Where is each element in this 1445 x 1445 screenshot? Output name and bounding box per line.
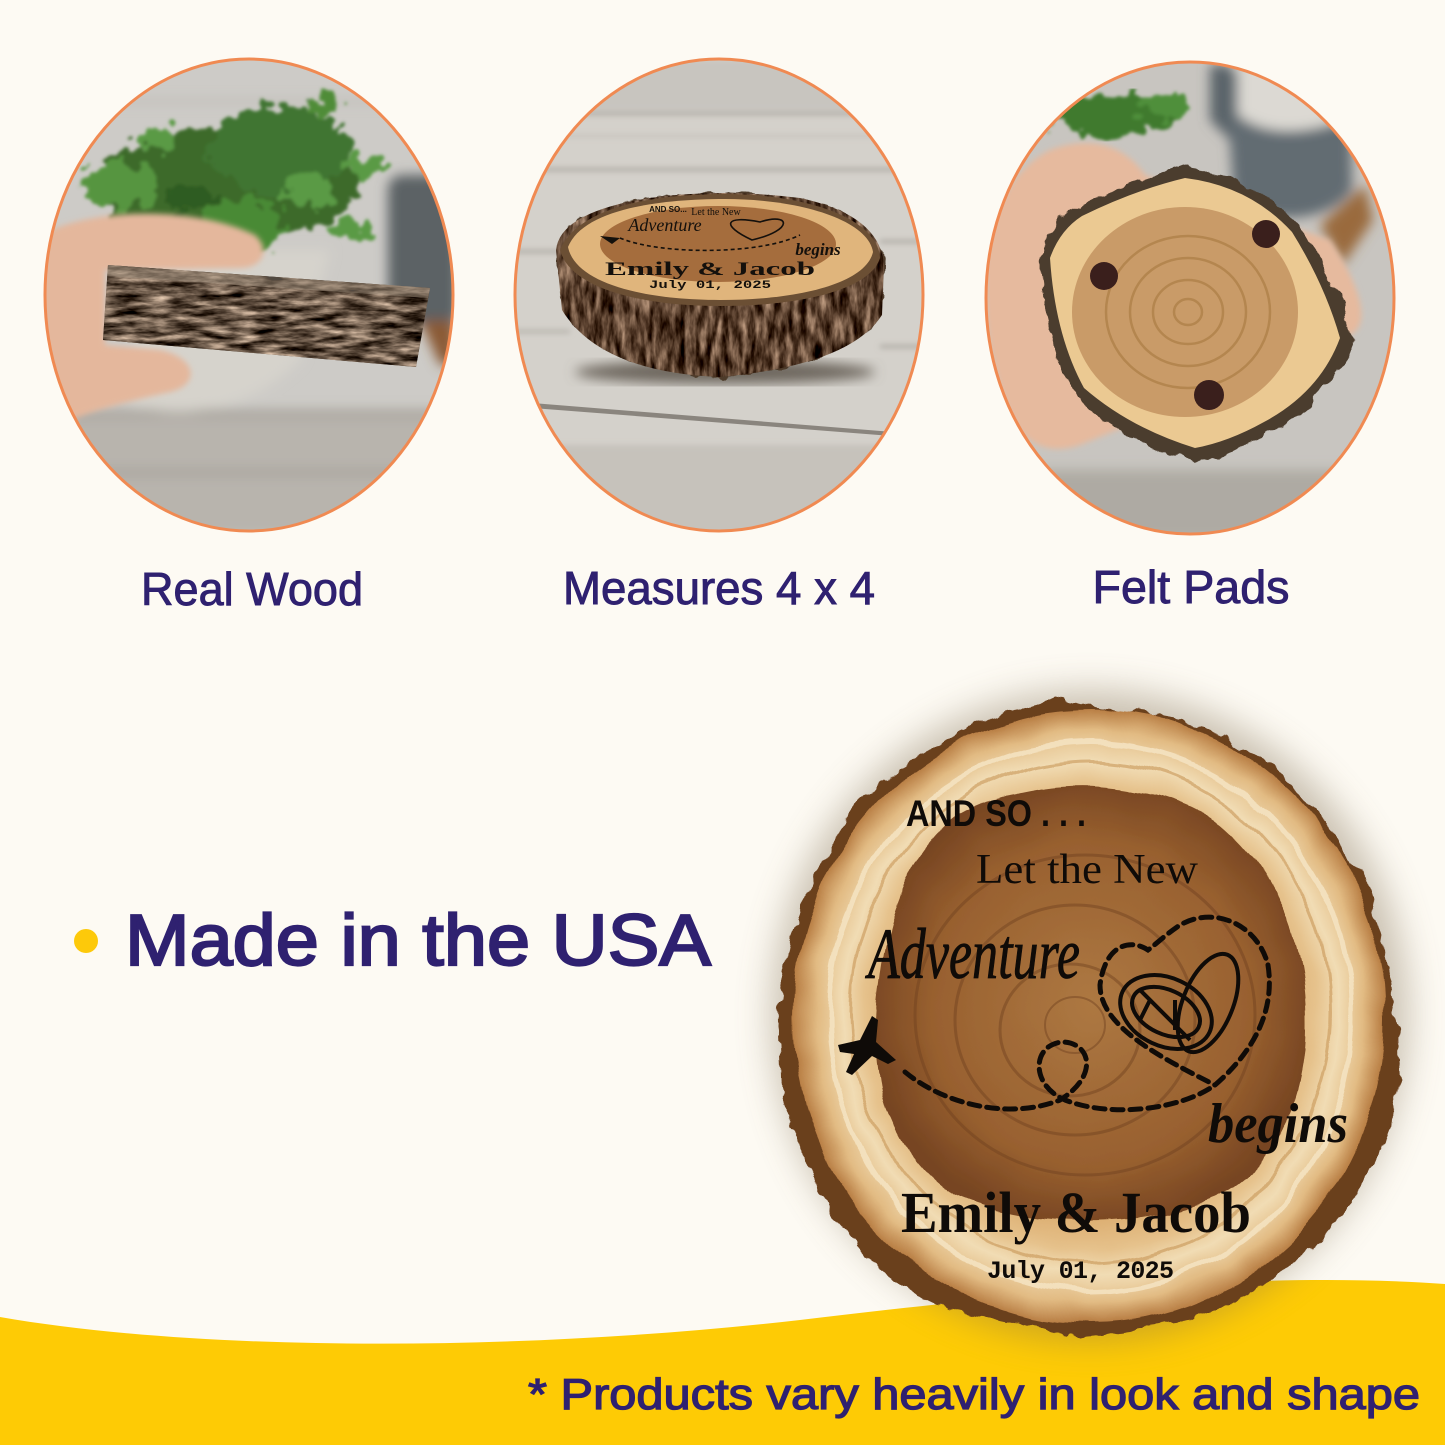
engraving on small coaster: Emily & Jacob xyxy=(605,259,815,280)
photo frame: underside xyxy=(986,62,1394,534)
engraving on small coaster: July 01, 2025 xyxy=(649,280,772,292)
heartwood xyxy=(876,786,1306,1221)
engraving on small coaster: Let the New xyxy=(691,207,741,218)
photo: coaster underside with felt pads xyxy=(980,55,1400,540)
caption: measures: Measures 4 x 4 xyxy=(563,562,875,614)
caption: real wood: Real Wood xyxy=(141,563,363,615)
engraving on small coaster: Adventure xyxy=(627,215,702,235)
engraving on small coaster: begins xyxy=(795,240,841,259)
plant leaves xyxy=(82,95,389,253)
engraving: and so: AND SO . . . xyxy=(906,793,1086,834)
felt pads xyxy=(1090,220,1280,410)
engraving on small coaster: AND SO... xyxy=(649,205,687,214)
bullet: made in the usa xyxy=(74,929,98,953)
bark ring xyxy=(778,697,1400,1338)
yellow wave band xyxy=(0,1280,1445,1445)
sapwood xyxy=(794,710,1386,1324)
engraving: adventure: Adventure xyxy=(865,914,1080,994)
footnote: * Products vary heavily in look and shape xyxy=(528,1370,1420,1419)
photo: coaster on wooden table xyxy=(510,55,930,535)
engraving: names: Emily & Jacob xyxy=(901,1180,1251,1245)
caption: felt pads: Felt Pads xyxy=(1092,561,1290,613)
large engraved coaster xyxy=(778,697,1400,1338)
heading: made in the usa: Made in the USA xyxy=(125,901,711,981)
icon: wedding rings xyxy=(1108,945,1251,1063)
photo frame: coaster on table xyxy=(515,59,923,531)
engraving: date: July 01, 2025 xyxy=(987,1257,1174,1286)
icon: flight path with heart xyxy=(905,917,1269,1110)
engraving on small coaster xyxy=(605,205,841,292)
engraving: begins: begins xyxy=(1208,1093,1348,1155)
photo: real wood, side of coaster held in hand xyxy=(40,55,460,536)
photo frame: real wood xyxy=(45,59,453,531)
icon: airplane xyxy=(838,1016,896,1075)
engraving: let the new: Let the New xyxy=(976,847,1199,893)
coaster shadow xyxy=(772,690,1408,1340)
